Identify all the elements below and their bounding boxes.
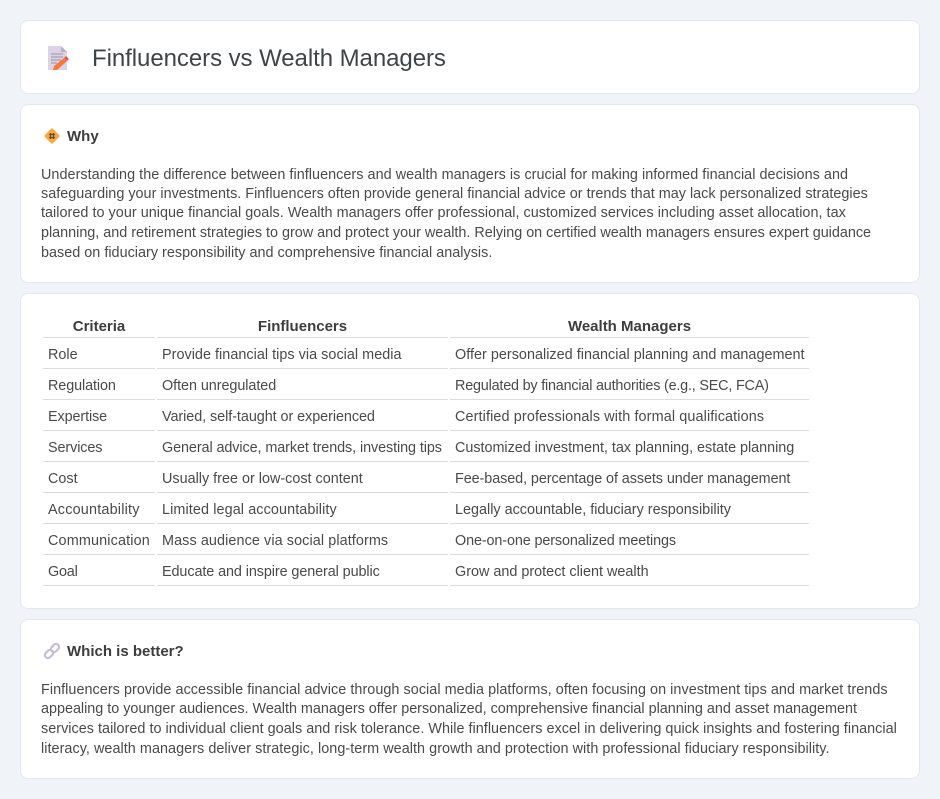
row: services: General advice, market trends, investing tips	[162, 440, 442, 456]
row: role: Offer personalized financial planning and management	[455, 347, 805, 363]
row: role: Role	[48, 347, 78, 363]
row: regulation: Regulated by financial authorities (e.g., SEC, FCA)	[455, 378, 769, 394]
row: goal: Grow and protect client wealth	[455, 564, 649, 580]
row: services: Services	[48, 440, 102, 456]
text block: why: Understanding the difference between finfluencers and wealth managers is crucial for making informed financial decisions and	[41, 167, 848, 183]
table header: Criteria	[73, 318, 125, 335]
panel: which is better	[20, 619, 920, 779]
text block: which is better	[41, 682, 897, 757]
table header: Wealth Managers	[568, 318, 691, 335]
panel: why	[20, 104, 920, 283]
icon: warning diamond	[44, 128, 60, 144]
row: cost: Usually free or low-cost content	[162, 471, 363, 487]
panel: title card	[20, 20, 920, 94]
title: Finfluencers vs Wealth Managers	[92, 45, 446, 72]
table header: Finfluencers	[258, 318, 347, 335]
text block: which is better: literacy, wealth managers deliver strategic, long-term wealth growth and protection with professional fiduciary responsibility.	[41, 741, 830, 757]
row: communication: One-on-one personalized meetings	[455, 533, 676, 549]
heading: why: Why	[67, 128, 99, 145]
row: services	[43, 440, 809, 462]
row: communication: Communication	[48, 533, 150, 549]
icon: chain link	[44, 642, 60, 660]
table header	[43, 318, 809, 338]
row: role: Provide financial tips via social media	[162, 347, 402, 363]
row: communication	[43, 533, 809, 555]
text block: which is better: services tailored to individual client goals and risk tolerance. While finfluencers excel in delivering quick insights and fostering financial	[41, 721, 897, 737]
text block: which is better: appealing to younger audiences. Wealth managers offer personalized, comprehensive financial planning and asset management	[41, 701, 857, 717]
row: expertise	[43, 409, 809, 431]
row: accountability: Accountability	[48, 502, 140, 518]
text block: why: planning, and retirement strategies to grow and protect your wealth. Relying on certified wealth managers ensures expert guidance	[41, 225, 871, 241]
row: goal: Goal	[48, 564, 78, 580]
icon: memo with pencil	[48, 46, 69, 70]
row: goal: Educate and inspire general public	[162, 564, 380, 580]
row: accountability	[43, 502, 809, 524]
row: regulation: Often unregulated	[162, 378, 276, 394]
row: goal	[43, 564, 809, 586]
row: services: Customized investment, tax planning, estate planning	[455, 440, 794, 456]
row: accountability: Legally accountable, fiduciary responsibility	[455, 502, 731, 518]
panel: comparison table	[20, 293, 920, 609]
text block: why: tailored to your unique financial goals. Wealth managers offer professional, customized services including asset allocation, tax	[41, 205, 846, 221]
text block: why: safeguarding your investments. Finfluencers often provide general financial advice or trends that may lack personalized strategies	[41, 186, 868, 202]
row: regulation	[43, 378, 809, 400]
row: regulation: Regulation	[48, 378, 116, 394]
row: expertise: Varied, self-taught or experienced	[162, 409, 375, 425]
heading: which is better: Which is better?	[67, 643, 184, 660]
text block: which is better: Finfluencers provide accessible financial advice through social media platforms, often focusing on investment tips and market trends	[41, 682, 888, 698]
row: accountability: Limited legal accountability	[162, 502, 337, 518]
row: expertise: Certified professionals with formal qualifications	[455, 409, 764, 425]
row: cost: Cost	[48, 471, 78, 487]
row: role	[43, 347, 809, 369]
text block: why	[41, 167, 871, 261]
row: cost: Fee-based, percentage of assets under management	[455, 471, 790, 487]
row: communication: Mass audience via social platforms	[162, 533, 388, 549]
text block: why: based on fiduciary responsibility and comprehensive financial analysis.	[41, 245, 492, 261]
row: cost	[43, 471, 809, 493]
row: expertise: Expertise	[48, 409, 107, 425]
